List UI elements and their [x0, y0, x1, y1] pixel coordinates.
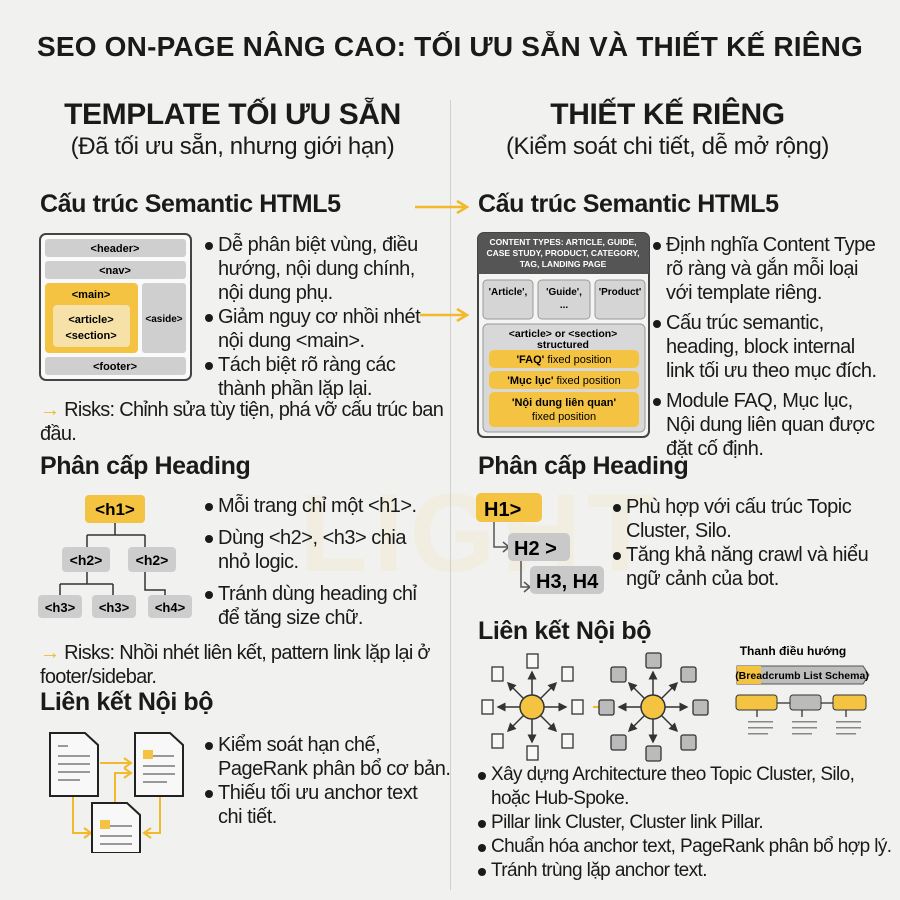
left heading bullets: Tránh dùng heading chỉ: [218, 583, 416, 605]
left heading bullets: Mỗi trang chỉ một <h1>.: [218, 495, 417, 517]
left heading tree: <h3>: [45, 600, 76, 615]
left column header: TEMPLATE TỐI ƯU SẴN: [64, 98, 401, 131]
left heading tree: <h1>: [95, 500, 135, 519]
left heading tree: <h2>: [70, 552, 102, 568]
right internal link bullets: Chuẩn hóa anchor text, PageRank phân bổ hợp lý.: [491, 836, 891, 857]
right internal link bullets: hoặc Hub-Spoke.: [491, 788, 629, 809]
right column header: [506, 97, 829, 160]
left semantic diagram: [39, 233, 192, 381]
left risk 1: [40, 399, 443, 445]
right hub diagrams: [481, 644, 870, 762]
left semantic bullets: nội dung phụ.: [218, 282, 333, 304]
right semantic bullets: Nội dung liên quan được: [666, 414, 874, 436]
left heading bullets: [205, 494, 417, 629]
right semantic diagram: CONTENT TYPES: ARTICLE, GUIDE,: [489, 237, 637, 247]
left semantic bullets: hướng, nội dung chính,: [218, 258, 415, 280]
right semantic bullets: đặt cố định.: [666, 438, 763, 460]
right semantic bullets: Cấu trúc semantic,: [666, 312, 824, 334]
right heading bullets: [613, 496, 868, 590]
right semantic bullets: với template riêng.: [666, 282, 822, 304]
left heading tree: <h3>: [99, 600, 130, 615]
left internal link bullets: chi tiết.: [218, 806, 277, 828]
right semantic diagram: <article> or <section>: [509, 328, 617, 340]
right semantic diagram: 'Guide',: [546, 287, 582, 298]
right semantic bullets: rõ ràng và gắn mỗi loại: [666, 258, 858, 280]
right heading diagram: H1>: [484, 499, 521, 521]
left semantic bullets: [205, 233, 421, 400]
left risk 1: đầu.: [40, 423, 76, 445]
title: SEO ON-PAGE NÂNG CAO: TỐI ƯU SẴN VÀ THIẾT KẾ RIÊNG: [37, 31, 863, 62]
right semantic diagram: 'Nội dung liên quan': [512, 397, 616, 409]
left heading bullets: để tăng size chữ.: [218, 607, 363, 629]
right heading bullets: Tăng khả năng crawl và hiểu: [626, 544, 868, 566]
left docs diagram: [49, 732, 184, 853]
right internal link bullets: Tránh trùng lặp anchor text.: [491, 860, 707, 881]
right heading diagram: H3, H4: [536, 571, 599, 593]
left heading tree: <h2>: [136, 552, 168, 568]
heading: left heading hierarchy: Phân cấp Heading: [40, 452, 250, 480]
right semantic bullets: link tối ưu theo mục đích.: [666, 360, 876, 382]
left semantic bullets: Dễ phân biệt vùng, điều: [218, 234, 418, 256]
left semantic diagram: <section>: [65, 330, 117, 342]
left heading bullets: nhỏ logic.: [218, 551, 299, 573]
left semantic diagram: <footer>: [93, 361, 137, 373]
left heading bullets: Dùng <h2>, <h3> chia: [218, 527, 406, 549]
left semantic diagram: <nav>: [99, 265, 131, 277]
arrows between columns: [415, 200, 470, 322]
left semantic bullets: nội dung <main>.: [218, 330, 365, 352]
left internal link bullets: [205, 734, 450, 828]
left semantic diagram: <aside>: [145, 314, 183, 325]
right heading diagram: [476, 493, 604, 594]
left risk 2: [40, 642, 430, 688]
heading: right heading hierarchy: Phân cấp Heading: [478, 452, 688, 480]
right internal link bullets: Xây dựng Architecture theo Topic Cluster, Silo,: [491, 764, 854, 785]
watermark: LIGHT: [300, 472, 660, 595]
right hub diagrams: Thanh điều hướng: [740, 644, 846, 658]
left semantic bullets: Tách biệt rõ ràng các: [218, 354, 395, 376]
right column header: THIẾT KẾ RIÊNG: [550, 98, 785, 131]
right semantic bullets: Định nghĩa Content Type: [666, 234, 875, 256]
left semantic bullets: Giảm nguy cơ nhồi nhét: [218, 306, 420, 328]
right semantic diagram: 'Mục lục' fixed position: [507, 375, 621, 387]
heading: right internal links: Liên kết Nội bộ: [478, 617, 651, 645]
right column header: (Kiểm soát chi tiết, dễ mở rộng): [506, 133, 829, 160]
left internal link bullets: PageRank phân bổ cơ bản.: [218, 758, 450, 780]
right semantic bullets: Module FAQ, Mục lục,: [666, 390, 853, 412]
right hub diagrams: (Breadcrumb List Schema): [735, 670, 869, 682]
left semantic bullets: thành phần lặp lại.: [218, 378, 372, 400]
divider: [450, 100, 451, 890]
right heading bullets: Phù hợp với cấu trúc Topic: [626, 496, 851, 518]
left semantic diagram: <article>: [68, 314, 114, 326]
heading: left internal links: Liên kết Nội bộ: [40, 688, 213, 716]
left semantic diagram: <header>: [91, 243, 139, 255]
right internal link bullets: [478, 764, 891, 881]
right semantic diagram: 'FAQ' fixed position: [516, 354, 612, 366]
heading: left semantic: Cấu trúc Semantic HTML5: [40, 190, 341, 218]
right semantic diagram: TAG, LANDING PAGE: [520, 259, 607, 269]
heading: right semantic: Cấu trúc Semantic HTML5: [478, 190, 779, 218]
left risk 2: footer/sidebar.: [40, 666, 156, 688]
right semantic diagram: structured: [537, 339, 589, 351]
right internal link bullets: Pillar link Cluster, Cluster link Pillar.: [491, 812, 763, 833]
left heading tree: [38, 495, 192, 618]
left risk 2: → Risks: Nhồi nhét liên kết, pattern link lặp lại ở: [40, 642, 430, 664]
right semantic bullets: heading, block internal: [666, 336, 855, 358]
left column header: (Đã tối ưu sẵn, nhưng giới hạn): [71, 133, 394, 160]
left column header: [64, 98, 401, 160]
right heading diagram: H2 >: [514, 538, 557, 560]
left internal link bullets: Thiếu tối ưu anchor text: [218, 782, 417, 804]
left semantic diagram: <main>: [72, 289, 110, 301]
right heading bullets: ngữ cảnh của bot.: [626, 568, 779, 590]
right semantic diagram: fixed position: [532, 411, 596, 423]
left internal link bullets: Kiểm soát hạn chế,: [218, 734, 380, 756]
right semantic diagram: 'Article',: [489, 287, 528, 298]
right semantic diagram: CASE STUDY, PRODUCT, CATEGORY,: [486, 248, 640, 258]
right semantic diagram: [477, 232, 650, 438]
right semantic diagram: ...: [560, 300, 568, 311]
right heading bullets: Cluster, Silo.: [626, 520, 731, 542]
right semantic bullets: [653, 234, 876, 460]
left heading tree: <h4>: [155, 600, 186, 615]
right semantic diagram: 'Product': [599, 287, 641, 298]
left risk 1: → Risks: Chỉnh sửa tùy tiện, phá vỡ cấu trúc ban: [40, 399, 443, 421]
